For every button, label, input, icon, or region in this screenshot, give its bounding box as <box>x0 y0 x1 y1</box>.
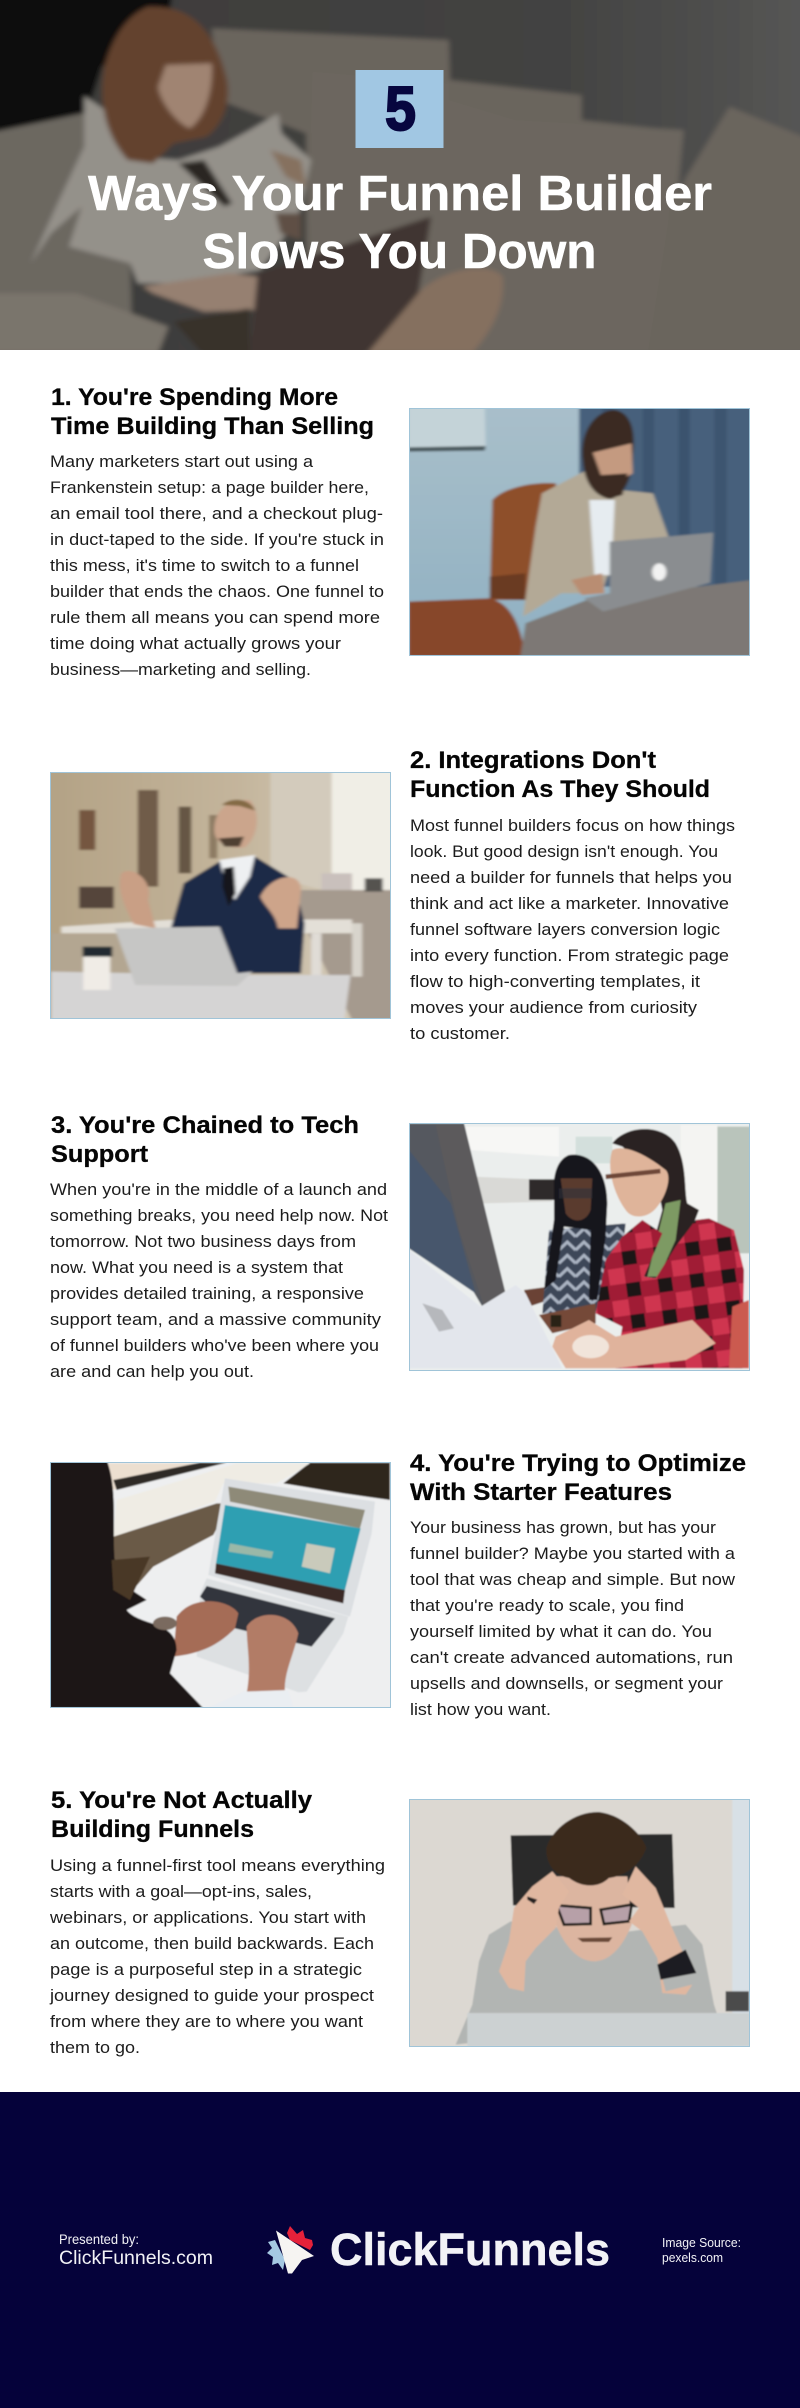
body text 2: to customer. <box>410 1024 510 1043</box>
body text 3: When you're in the middle of a launch and <box>50 1180 387 1199</box>
body text 2: moves your audience from curiosity <box>410 998 698 1017</box>
body text 2: funnel software layers conversion logic <box>410 920 721 939</box>
panel: section 2 <box>46 747 735 1043</box>
icon: ClickFunnels cursor logo <box>267 2226 314 2274</box>
body text 1: builder that ends the chaos. One funnel to <box>50 582 384 601</box>
body text 2: into every function. From strategic page <box>410 946 729 965</box>
body text 3: something breaks, you need help now. Not <box>50 1206 388 1225</box>
photo: man at laptop in leather chair <box>403 403 760 660</box>
title: Slows You Down <box>202 225 596 279</box>
body text 3 <box>50 1180 388 1381</box>
heading 5: 5. You're Not Actually <box>51 1787 313 1814</box>
body text 2 <box>410 816 735 1043</box>
footer panel <box>0 2092 800 2408</box>
body text 3: now. What you need is a system that <box>50 1258 343 1277</box>
photo: stressed man holding his head <box>406 1795 756 2051</box>
photo: hands typing on laptop <box>50 1460 393 1710</box>
body text 5: them to go. <box>50 2038 140 2057</box>
body text 4: funnel builder? Maybe you started with a <box>410 1544 736 1563</box>
panel: section 1 <box>50 384 760 679</box>
body text 4: yourself limited by what it can do. You <box>410 1622 712 1641</box>
body text 2: flow to high-converting templates, it <box>410 972 700 991</box>
image source credit: pexels.com <box>662 2250 723 2265</box>
body text 1: in duct-taped to the side. If you're stuck in <box>50 530 384 549</box>
presented by credit <box>59 2232 213 2269</box>
heading 3: Support <box>51 1141 148 1168</box>
body text 1: Many marketers start out using a <box>50 452 314 471</box>
photo: frustrated man in suit at outdoor table <box>46 770 398 1023</box>
body text 5: from where they are to where you want <box>50 2012 363 2031</box>
body text 4: can't create advanced automations, run <box>410 1648 733 1667</box>
body text 3: tomorrow. Not two business days from <box>50 1232 356 1251</box>
body text 4 <box>410 1518 736 1719</box>
body text 4: tool that was cheap and simple. But now <box>410 1570 736 1589</box>
heading 2 <box>410 747 710 803</box>
image source credit: Image Source: <box>662 2235 741 2250</box>
body text 5: an outcome, then build backwards. Each <box>50 1934 374 1953</box>
body text 1: time doing what actually grows your <box>50 634 341 653</box>
body text 3: provides detailed training, a responsive <box>50 1284 364 1303</box>
panel: section 4 <box>50 1450 746 1719</box>
heading 1: 1. You're Spending More <box>51 384 338 411</box>
heading 3: 3. You're Chained to Tech <box>51 1112 359 1139</box>
body text 4: that you're ready to scale, you find <box>410 1596 684 1615</box>
panel: section 3 <box>50 1112 752 1381</box>
body text 2: think and act like a marketer. Innovative <box>410 894 729 913</box>
ClickFunnels wordmark: ClickFunnels <box>330 2224 610 2275</box>
body text 4: upsells and downsells, or segment your <box>410 1674 723 1693</box>
presented by credit: ClickFunnels.com <box>59 2248 213 2269</box>
body text 1: Frankenstein setup: a page builder here, <box>50 478 369 497</box>
heading 5: Building Funnels <box>51 1816 254 1843</box>
body text 3: support team, and a massive community <box>50 1310 382 1329</box>
body text 5: page is a purposeful step in a strategic <box>50 1960 363 1979</box>
body text 5: Using a funnel-first tool means everything <box>50 1856 385 1875</box>
hero background photo <box>0 0 800 357</box>
heading 3 <box>51 1112 359 1168</box>
body text 1: an email tool there, and a checkout plug- <box>50 504 383 523</box>
number badge: 5 <box>385 75 416 144</box>
body text 5: webinars, or applications. You start with <box>49 1908 366 1927</box>
heading 5 <box>51 1787 313 1843</box>
body text 2: need a builder for funnels that helps you <box>410 868 732 887</box>
body text 5: journey designed to guide your prospect <box>49 1986 374 2005</box>
body text 5 <box>49 1856 385 2057</box>
body text 1 <box>50 452 384 679</box>
title: Ways Your Funnel Builder <box>88 167 712 221</box>
photo: two women at a computer <box>409 1120 752 1377</box>
heading 2: 2. Integrations Don't <box>410 747 656 774</box>
heading 4 <box>410 1450 746 1506</box>
hero banner <box>0 0 800 357</box>
title <box>88 167 712 279</box>
body text 3: are and can help you out. <box>50 1362 254 1381</box>
heading 2: Function As They Should <box>410 776 710 803</box>
body text 4: Your business has grown, but has your <box>410 1518 716 1537</box>
heading 4: 4. You're Trying to Optimize <box>410 1450 746 1477</box>
body text 4: list how you want. <box>410 1700 551 1719</box>
image source credit <box>662 2235 741 2265</box>
presented by credit: Presented by: <box>59 2232 139 2247</box>
body text 5: starts with a goal—opt-ins, sales, <box>50 1882 312 1901</box>
body text 2: Most funnel builders focus on how things <box>410 816 735 835</box>
number badge <box>356 70 444 148</box>
body text 3: of funnel builders who've been where you <box>50 1336 379 1355</box>
body text 1: rule them all means you can spend more <box>50 608 380 627</box>
body text 1: business—marketing and selling. <box>50 660 311 679</box>
body text 1: this mess, it's time to switch to a funnel <box>50 556 359 575</box>
heading 1: Time Building Than Selling <box>51 413 374 440</box>
heading 4: With Starter Features <box>410 1479 672 1506</box>
heading 1 <box>51 384 374 440</box>
body text 2: look. But good design isn't enough. You <box>410 842 718 861</box>
panel: section 5 <box>49 1787 756 2057</box>
